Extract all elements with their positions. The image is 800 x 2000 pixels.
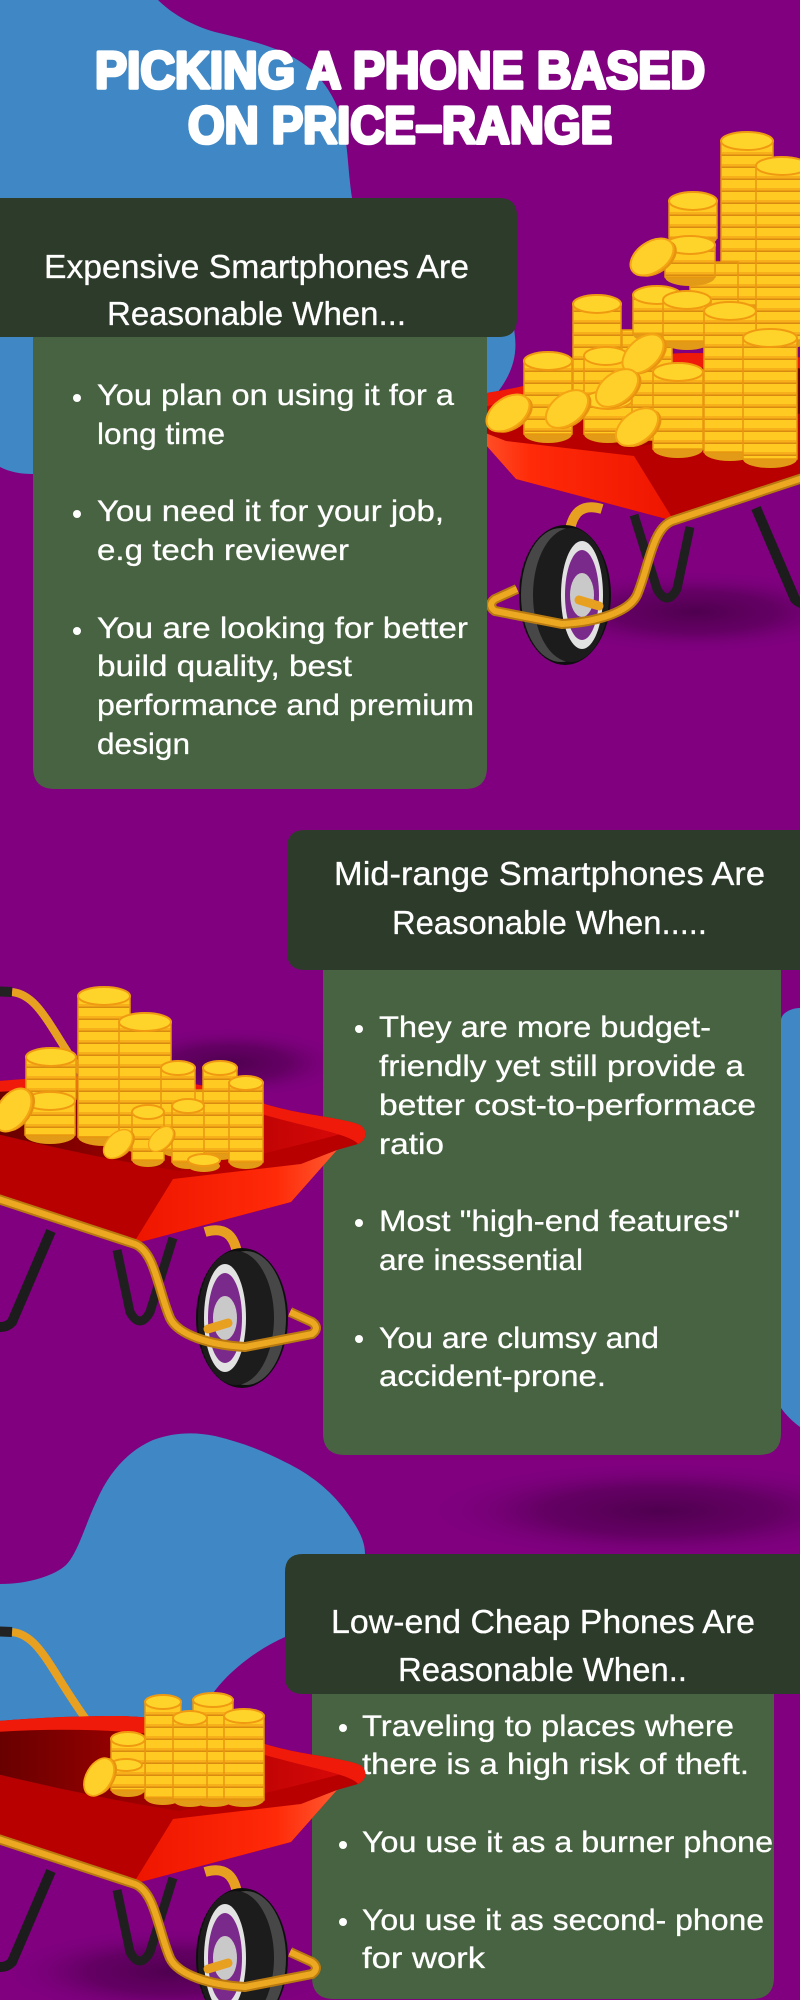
bullet list: You are looking for better	[97, 612, 468, 645]
heading: Low-end Cheap Phones Are	[331, 1603, 755, 1640]
bullet list	[73, 379, 474, 761]
bullet list: better cost-to-performace	[379, 1089, 756, 1122]
bullet list: You use it as second- phone	[362, 1904, 764, 1937]
bullet list: for work	[362, 1942, 486, 1975]
panel: mid-range smartphones	[287, 830, 800, 1455]
heading: Reasonable When.....	[392, 904, 707, 941]
heading: Reasonable When..	[398, 1651, 687, 1688]
heading	[334, 855, 765, 941]
panel: expensive smartphones	[0, 198, 517, 789]
bullet list: accident-prone.	[379, 1360, 606, 1393]
shadow: centre right	[420, 1461, 800, 1561]
heading: Expensive Smartphones Are	[44, 248, 469, 285]
bullet list: They are more budget-	[379, 1011, 711, 1044]
bullet list: are inessential	[379, 1244, 583, 1277]
title: PICKING A PHONE BASED	[95, 42, 705, 100]
heading: Reasonable When...	[107, 295, 406, 332]
shadow: second wheelbarrow	[110, 1027, 350, 1099]
bullet list: You plan on using it for a	[97, 379, 454, 412]
blob: lower left	[0, 1433, 365, 1735]
bullet list: build quality, best	[97, 650, 353, 683]
heading	[331, 1603, 755, 1688]
header bar	[0, 198, 517, 337]
bullet list: performance and premium	[97, 689, 474, 722]
bullet list	[355, 1011, 756, 1393]
blob: right edge	[781, 1008, 800, 1427]
bullet list: Traveling to places where	[362, 1710, 734, 1743]
bullet list: You use it as a burner phone	[362, 1826, 773, 1859]
shadow: first wheelbarrow	[525, 570, 800, 654]
wheelbarrow with medium coin stacks	[0, 987, 365, 1388]
panel: low-end cheap phones	[285, 1554, 800, 1999]
bullet list: e.g tech reviewer	[97, 534, 349, 567]
blob: top left	[0, 0, 515, 474]
header bar	[285, 1554, 800, 1694]
bullet list: design	[97, 728, 190, 761]
bullet list: You need it for your job,	[97, 495, 444, 528]
bullet list: there is a high risk of theft.	[362, 1748, 749, 1781]
heading: Mid-range Smartphones Are	[334, 855, 765, 892]
bullet list: Most "high-end features"	[379, 1205, 740, 1238]
wheelbarrow with small coin stacks	[0, 1631, 365, 2000]
body card	[323, 965, 781, 1455]
bullet list	[339, 1710, 773, 1975]
bullet list: friendly yet still provide a	[379, 1050, 744, 1083]
bullet list: You are clumsy and	[379, 1322, 659, 1355]
header bar	[287, 830, 800, 970]
wheelbarrow with tall coin stacks	[485, 131, 800, 665]
body card	[33, 330, 487, 789]
title: ON PRICE–RANGE	[188, 97, 612, 155]
bullet list: ratio	[379, 1128, 444, 1161]
body card	[312, 1690, 774, 1999]
title	[95, 42, 705, 155]
heading	[44, 248, 469, 332]
bullet list: long time	[97, 418, 225, 451]
shadow: third wheelbarrow	[0, 1928, 340, 2000]
